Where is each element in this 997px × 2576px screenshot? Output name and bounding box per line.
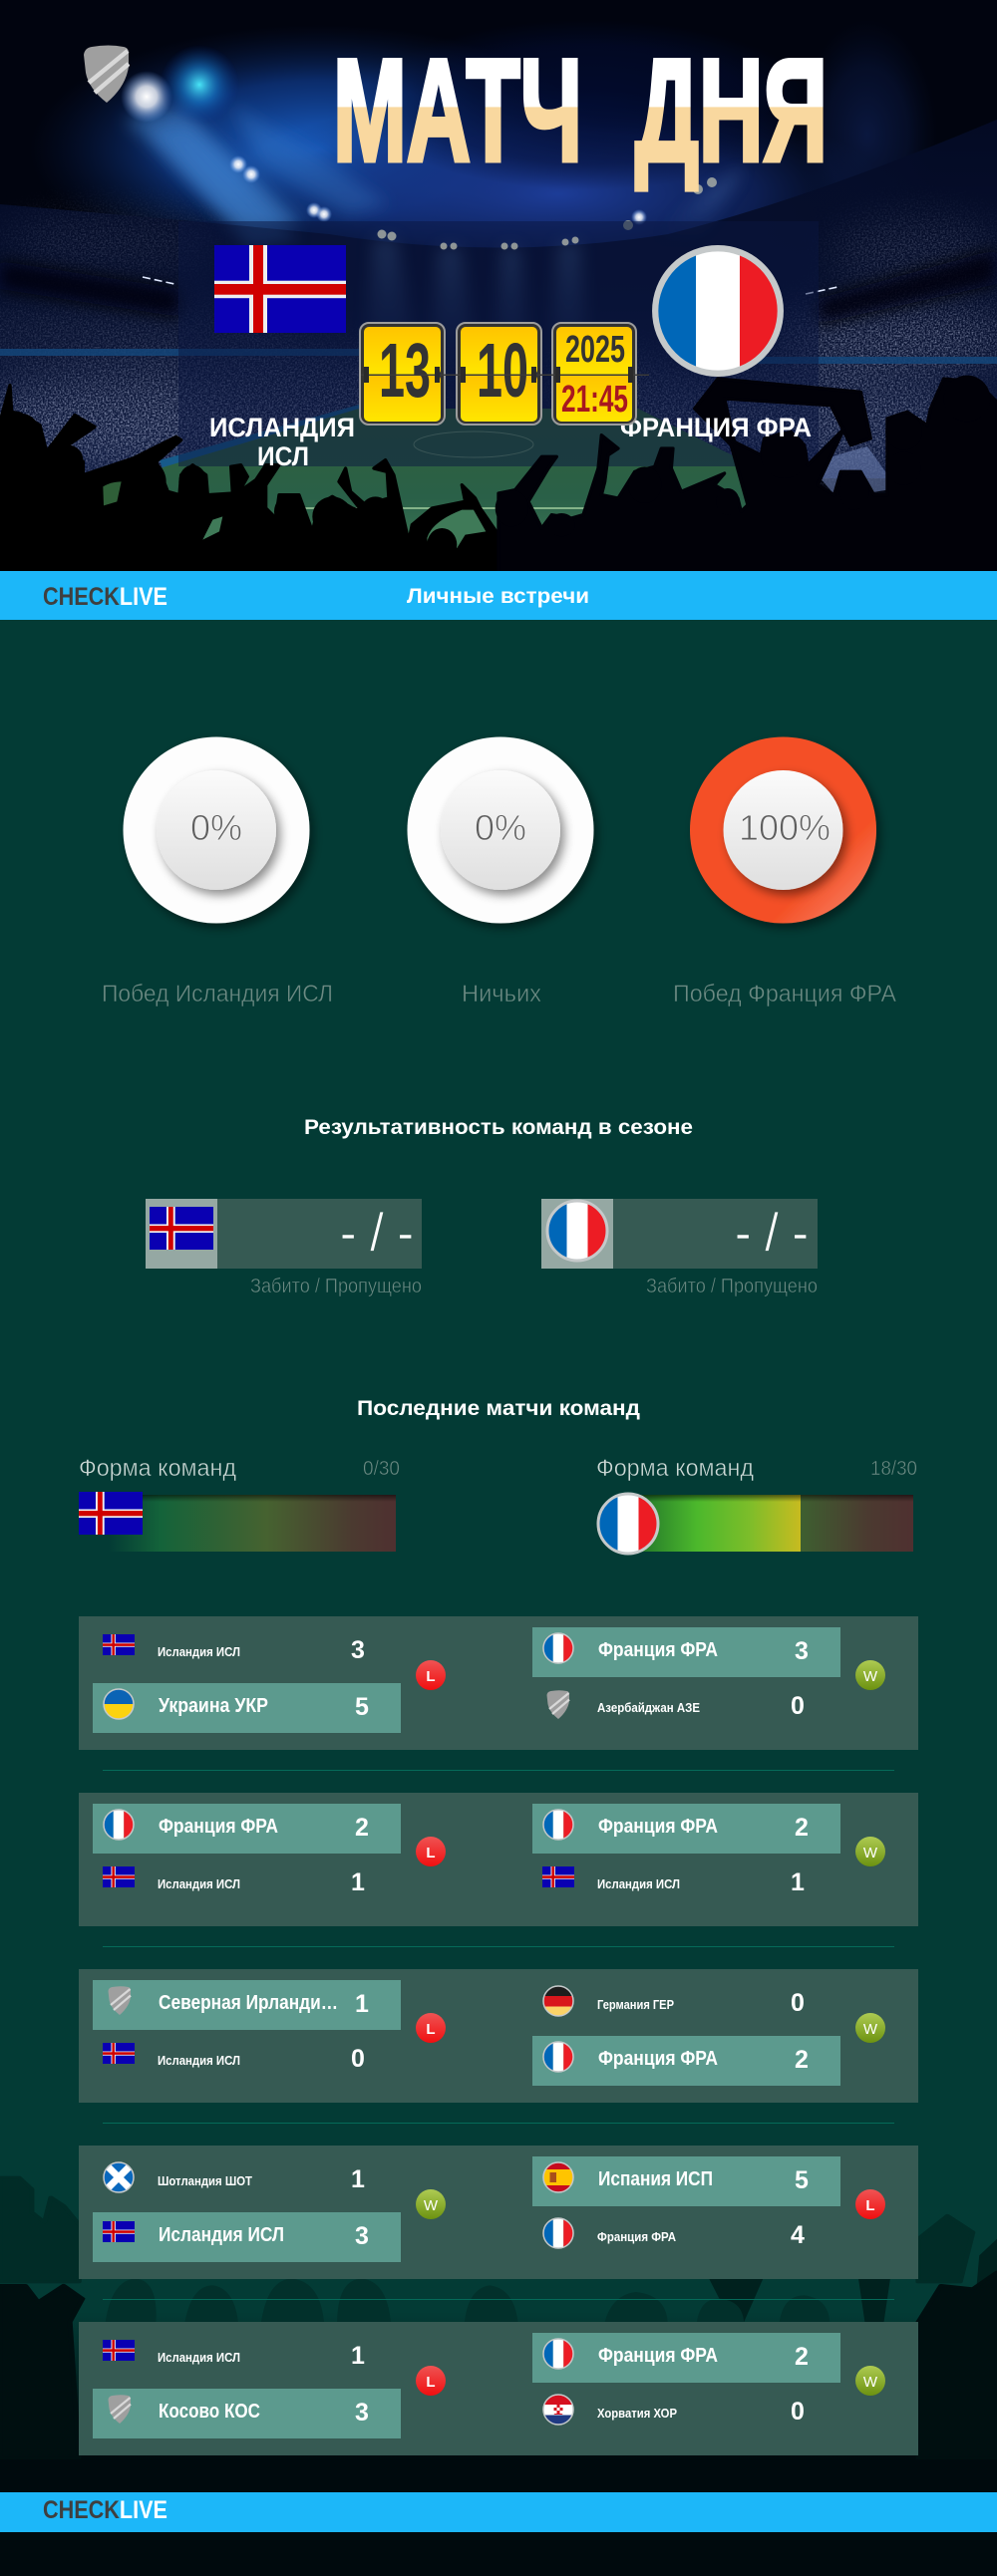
row: France 2: 2 [795,2343,809,2371]
row: Kosovo 3 [93,2389,401,2438]
row: Iceland 3: Исландия ИСЛ [159,2224,284,2246]
clock card: month [457,323,541,425]
match pair 3 [79,1969,918,2103]
flag: France [596,1492,660,1556]
row: Iceland 1 [542,1866,805,1896]
gauge: draws [407,737,594,923]
flag: Iceland [79,1492,143,1535]
form bar [628,1495,913,1552]
badge: win [416,2189,446,2219]
match pair 5 [79,2322,918,2455]
footer bar [0,2492,997,2532]
team name: France: ФРАНЦИЯ ФРА [620,413,812,442]
row: Azerbaijan 0 [546,1690,805,1720]
flag: France [542,1632,574,1664]
badge: loss [416,2013,446,2043]
flag: Spain [542,2161,574,2193]
badge: win: W [424,2197,439,2214]
row: France 3 [532,1627,840,1677]
form score: 18/30 [870,1458,917,1480]
row: Croatia 0: Хорватия ХОР [597,2406,677,2421]
row: Iceland 1: 1 [791,1868,805,1896]
form score: 0/30 [363,1458,400,1480]
badge: loss [416,1660,446,1690]
form panel: France [596,1455,917,1556]
row: France 4: 4 [791,2221,805,2249]
heading: head to head: Личные встречи [407,585,589,608]
row: France 2: 2 [795,2046,809,2074]
row: Scotland 1: Шотландия ШОТ [158,2173,252,2188]
title: ДНЯ [635,29,828,191]
flag: France [542,2338,574,2370]
row: Croatia 0 [542,2394,805,2426]
title: МАТЧ [333,29,582,191]
row: Iceland 3 [93,2212,401,2262]
row: Iceland 3: 3 [355,2222,369,2250]
row: France 2: 2 [795,1814,809,1842]
row: France 2 [532,2333,840,2383]
clock card: month: 10 [477,328,528,414]
row: France 3: 3 [795,1637,809,1665]
row: Ukraine 5: Украина УКР [159,1695,268,1717]
row: Azerbaijan 0: Азербайджан АЗЕ [597,1700,700,1715]
flag: France [542,2041,574,2073]
badge: loss [855,2189,885,2219]
caption: Забито / Пропущено [250,1276,422,1297]
flag: Scotland [103,2161,135,2193]
goals value: - / - [340,1203,414,1263]
row: France 4: Франция ФРА [597,2229,677,2244]
badge: loss: L [865,2197,875,2214]
row: Iceland 3: 3 [351,1636,365,1664]
icon: shield [108,2395,131,2424]
badge: loss [416,2366,446,2396]
row: Iceland 0 [103,2043,365,2073]
row: Spain 5 [532,2156,840,2206]
goals value: - / - [735,1203,809,1263]
row: France 2: 2 [355,1814,369,1842]
badge: win [855,1660,885,1690]
row: France 2 [93,1804,401,1854]
row: France 3: Франция ФРА [598,1639,718,1661]
heading: recent matches: Последние матчи команд [357,1396,640,1420]
flag: France large [651,244,785,378]
logo: CHECKLIVE [43,583,167,611]
row: Ukraine 5 [93,1683,401,1733]
badge: win [855,2013,885,2043]
row: France 2: Франция ФРА [598,2345,718,2367]
row: Iceland 1: Исландия ИСЛ [597,1876,680,1891]
gauge label: draws: Ничьих [462,981,541,1007]
hero: panel lights [377,229,578,249]
flag: Iceland [150,1207,213,1250]
row: Iceland 0: Исландия ИСЛ [158,2053,240,2068]
badge: win: W [863,2374,878,2391]
gauge: draws: 0% [475,807,526,848]
form label: Форма команд [79,1455,236,1482]
row: France 2 [532,2036,840,2086]
clock card: day [360,323,445,425]
clock card: year and kick-off time [552,323,636,425]
flag: Iceland [103,2340,135,2361]
bottom crowd silhouette [0,2177,997,2458]
form bar [109,1495,396,1552]
lower page background fade [0,2312,997,2576]
row: Iceland 1: Исландия ИСЛ [158,2350,240,2365]
hero: stadium background [0,0,997,571]
logo: CHECKLIVE [43,2496,167,2524]
flag: Iceland [103,2221,135,2242]
date and time flip clock [360,323,649,425]
gauge: Iceland wins: 0% [190,807,242,848]
flag: France [542,1809,574,1841]
heading: season performance: Результативность команд в сезоне [304,1115,693,1139]
team name: Iceland: ИСЛАНДИЯ [209,413,355,442]
flag: Iceland [103,1634,135,1655]
header bar [0,571,997,620]
match pair 2 [79,1793,918,1926]
row: Spain 5: 5 [795,2166,809,2194]
row: Iceland 0: 0 [351,2045,365,2073]
row: Croatia 0: 0 [791,2398,805,2426]
match pair 1 [79,1616,918,1750]
flag: Croatia [542,2394,574,2426]
badge: win [855,1837,885,1866]
clock card: day: 13 [379,328,431,414]
row: Iceland 1: 1 [351,1868,365,1896]
flag: Ukraine [103,1688,135,1720]
row: Iceland 1 [103,2340,365,2370]
row: Kosovo 3: Косово КОС [159,2401,260,2423]
row: Germany 0: 0 [791,1989,805,2017]
row: Ukraine 5: 5 [355,1693,369,1721]
row: Azerbaijan 0: 0 [791,1692,805,1720]
badge: win: W [863,2021,878,2038]
form panel: Iceland [79,1455,400,1552]
gauge: France wins [690,737,876,923]
team name: Iceland [209,413,355,471]
gauge: France wins: 100% [739,807,831,848]
flag: France [545,1199,609,1263]
row: Germany 0 [542,1985,805,2017]
hero: crowd silhouette right [496,376,997,573]
caption: Забито / Пропущено [646,1276,818,1297]
flag: France [542,2217,574,2249]
flag: Iceland [103,2043,135,2064]
stat box: Iceland goals [146,1199,422,1297]
badge: loss: L [426,1668,436,1685]
clock card: year and kick-off time: 2025 [565,329,625,371]
row: France 2 [532,1804,840,1854]
icon: neutral shield logo [84,46,129,103]
row: Northern Ireland 1: Северная Ирланди… [159,1992,338,2014]
row: Spain 5: Испания ИСП [598,2168,713,2190]
row: Scotland 1: 1 [351,2165,365,2193]
hero: crowd silhouette left [0,386,498,573]
row: Iceland 1: Исландия ИСЛ [158,1876,240,1891]
badge: loss: L [426,2021,436,2038]
row: Iceland 1 [103,1866,365,1896]
badge: win [855,2366,885,2396]
row: Northern Ireland 1: 1 [355,1990,369,2018]
row: Iceland 3: Исландия ИСЛ [158,1644,240,1659]
badge: win: W [863,1668,878,1685]
form label: Форма команд [596,1455,754,1482]
hero: translucent centre panel [178,221,819,466]
row: Scotland 1 [103,2161,365,2193]
row: Germany 0: Германия ГЕР [597,1997,674,2012]
row: Northern Ireland 1 [93,1980,401,2030]
flag: Iceland [103,1866,135,1887]
row: Iceland 1: 1 [351,2342,365,2370]
badge: loss: L [426,1845,436,1861]
stat box: France goals [541,1199,818,1297]
badge: loss: L [426,2374,436,2391]
gauge label: Iceland wins: Побед Исландия ИСЛ [102,981,333,1007]
flag: Iceland [542,1866,574,1887]
team name: Iceland: ИСЛ [257,441,309,471]
icon: shield [546,1690,569,1719]
clock card: year and kick-off time: 21:45 [561,379,628,421]
match pair 4 [79,2146,918,2279]
row: France 2: Франция ФРА [598,2048,718,2070]
row: France 2: Франция ФРА [598,1816,718,1838]
row: Kosovo 3: 3 [355,2399,369,2427]
row: Iceland 3 [103,1634,365,1664]
flag: France [103,1809,135,1841]
icon: shield [108,1986,131,2015]
row: France 4 [542,2217,805,2249]
badge: loss [416,1837,446,1866]
gauge label: France wins: Побед Франция ФРА [673,981,896,1007]
badge: win: W [863,1845,878,1861]
gauge: Iceland wins [124,737,309,923]
flag: Iceland large [214,245,346,333]
flag: Germany [542,1985,574,2017]
row: France 2: Франция ФРА [159,1816,278,1838]
